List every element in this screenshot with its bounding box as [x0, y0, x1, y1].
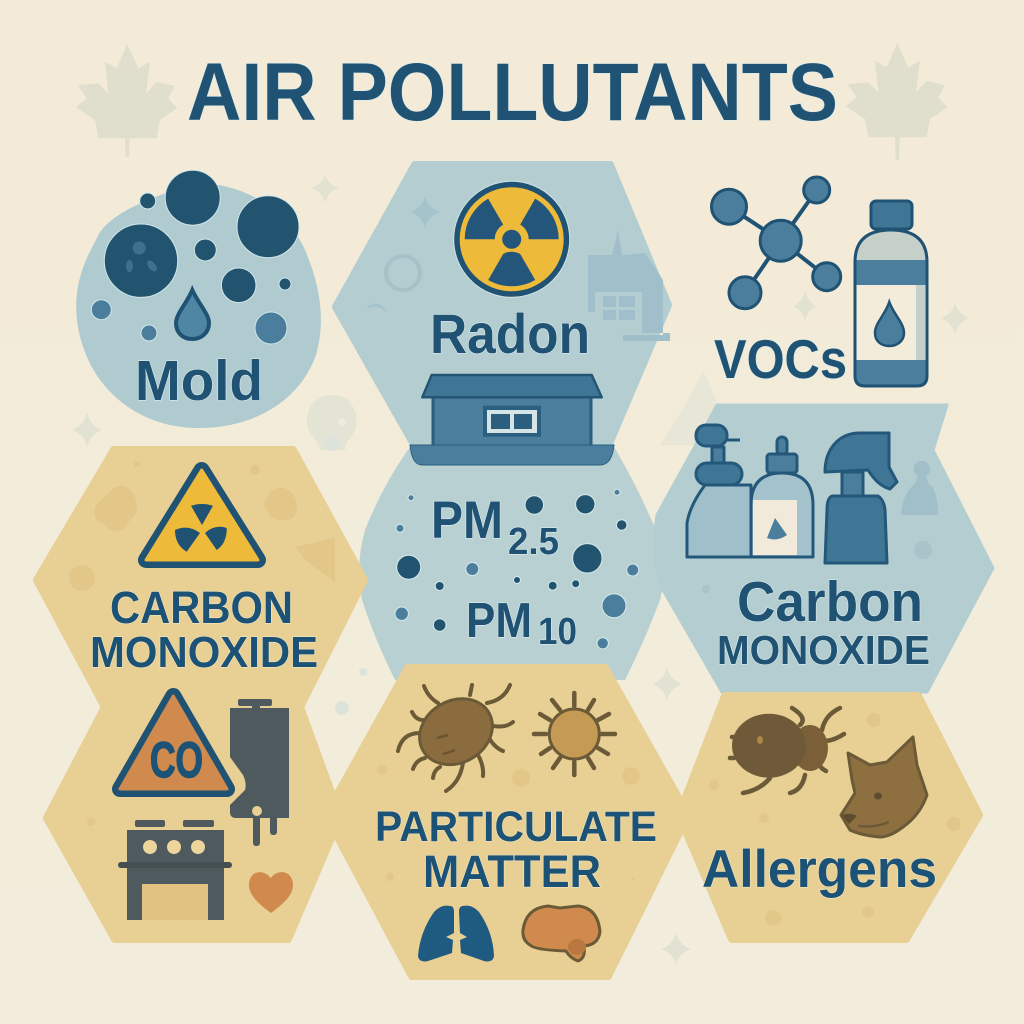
- icon: molecule: [712, 177, 841, 309]
- label: mold: Mold: [135, 349, 263, 413]
- icon: faint house: [588, 230, 670, 341]
- icon: stove: [118, 820, 232, 920]
- icon: CO warning triangle: CO: [150, 732, 203, 788]
- icon: maple leaf right: [846, 43, 947, 160]
- panel: cleaning products: [655, 405, 993, 692]
- background watermark icons: [72, 174, 969, 965]
- label: PM10: PM: [466, 594, 532, 648]
- icon: brain: [523, 906, 600, 961]
- label: PM2.5: [431, 491, 559, 563]
- panel: carbon monoxide sources: [37, 450, 364, 939]
- label: PM2.5: 2.5: [508, 521, 559, 563]
- icon: dust mite: [398, 685, 513, 791]
- icon: house: [410, 375, 614, 465]
- icon: animal head: [841, 737, 927, 837]
- label: monoxide: MONOXIDE: [90, 628, 318, 677]
- panel: radon: [336, 165, 670, 465]
- panel: particulate matter: [326, 668, 688, 976]
- label: allergens: Allergens: [702, 840, 937, 899]
- label: radon: Radon: [430, 302, 590, 365]
- icon: pollen grain: [534, 693, 615, 775]
- label: PM10: 10: [538, 611, 577, 653]
- icon: bottle: [855, 201, 927, 386]
- icon: faint figure: [901, 461, 938, 515]
- panel: mold: [76, 170, 321, 428]
- label: carbon: Carbon: [737, 570, 923, 634]
- icon: water heater: [230, 699, 289, 846]
- title: AIR POLLUTANTS: [187, 47, 838, 138]
- icon: radiation symbol: [454, 181, 570, 297]
- label: carbon: CARBON: [110, 582, 293, 633]
- label: particulate: PARTICULATE: [375, 803, 657, 851]
- panel: VOCs: [712, 177, 927, 390]
- label: PM10: [466, 594, 577, 653]
- icon: water drop: [176, 290, 209, 339]
- icon: yellow warning triangle: [146, 470, 258, 560]
- icon: lungs: [418, 906, 494, 961]
- icon: CO warning triangle: [120, 696, 227, 789]
- panel: particle sizes: [359, 440, 664, 680]
- label: matter: MATTER: [423, 846, 601, 897]
- panel: allergens: [679, 696, 979, 939]
- icon: mite: [730, 708, 844, 793]
- icon: heart: [249, 872, 293, 913]
- icon: dropper bottle: [751, 437, 813, 557]
- icon: maple leaf left: [76, 44, 177, 157]
- icon: spray bottle: [825, 433, 897, 563]
- label: PM2.5: PM: [431, 491, 503, 550]
- label: monoxide: MONOXIDE: [717, 627, 930, 673]
- label: VOCs: VOCs: [714, 328, 847, 390]
- icon: pump bottle: [687, 425, 751, 557]
